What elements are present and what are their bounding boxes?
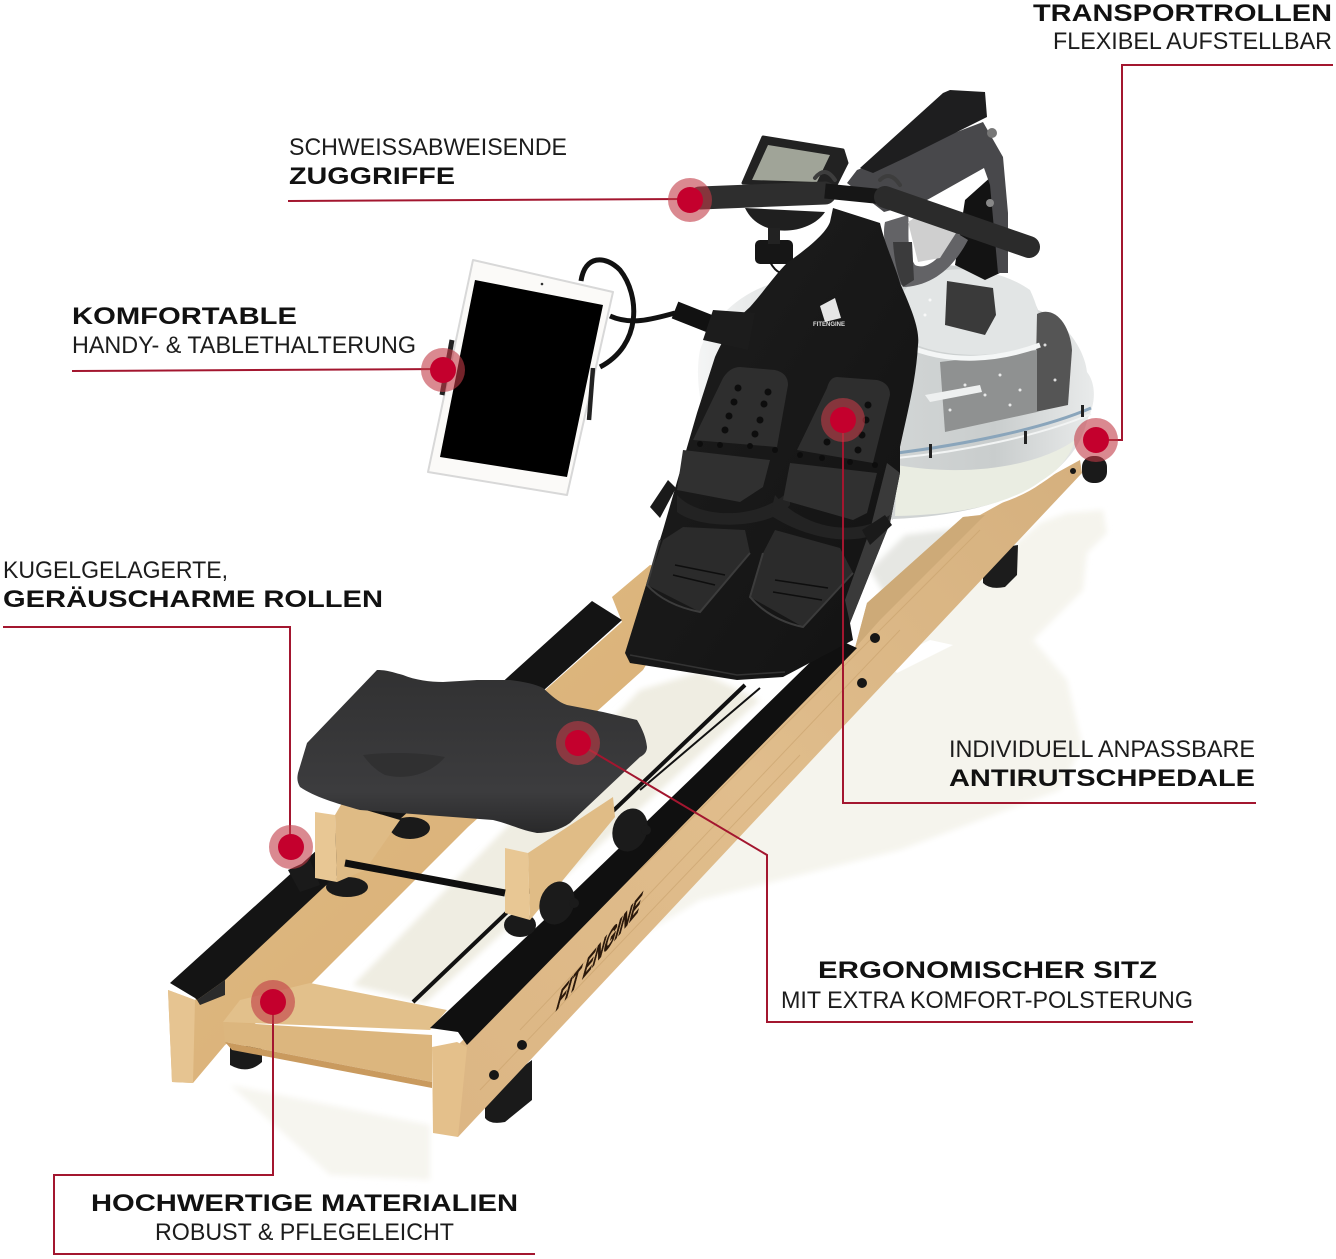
left pedal: [693, 367, 788, 453]
label: Sitz: [781, 957, 1193, 1014]
label: Materialien: HOCHWERTIGE MATERIALIEN: [91, 1190, 518, 1217]
hotspot markers: [251, 178, 1118, 1024]
tablet: [428, 260, 613, 495]
flywheel frame: [847, 90, 1008, 287]
label: Zuggriffe: ZUGGRIFFE: [289, 163, 455, 190]
right side guard: [845, 463, 900, 623]
label: Rollen: KUGELGELAGERTE,: [3, 557, 228, 584]
foot rests: [630, 527, 853, 675]
rollers: [534, 804, 653, 929]
label: Tablethalterung: HANDY- & TABLETHALTERUNG: [72, 332, 416, 359]
label: Transportrollen: [1033, 0, 1332, 55]
foot straps: [650, 450, 892, 545]
brand text on rail: FIT ENGINE: [553, 883, 646, 1019]
label: Sitz: MIT EXTRA KOMFORT-POLSTERUNG: [781, 987, 1193, 1014]
axle: [345, 863, 505, 893]
label: Sitz: ERGONOMISCHER SITZ: [818, 957, 1157, 984]
front cross bar: [223, 983, 447, 1088]
seat carriage: [288, 670, 653, 937]
left wooden rail: [168, 565, 700, 1083]
foot plate: [625, 208, 918, 680]
label: Zuggriffe: SCHWEISSABWEISENDE: [289, 134, 567, 161]
centre guide rail: [413, 685, 760, 1002]
seat cushion: [297, 670, 647, 833]
disc wheels: [288, 817, 536, 937]
monitor: [743, 137, 847, 187]
floor reflection: [230, 510, 1107, 1180]
logo: [813, 298, 845, 328]
tablet holder arm: [581, 260, 755, 367]
label: Zuggriffe: [289, 134, 567, 190]
right pedal: [797, 377, 890, 468]
label: Antirutschpedale: ANTIRUTSCHPEDALE: [949, 765, 1255, 792]
seat block left: [315, 803, 400, 882]
label: Tablethalterung: KOMFORTABLE: [72, 303, 297, 330]
handlebar: [700, 172, 1029, 247]
left black rail: [170, 601, 622, 1005]
label: Materialien: [91, 1190, 518, 1246]
label: Rollen: [3, 557, 383, 613]
back wooden rail: [458, 460, 1082, 1137]
label: Materialien: ROBUST & PFLEGELEICHT: [155, 1219, 454, 1246]
label: Antirutschpedale: INDIVIDUELL ANPASSBARE: [949, 736, 1255, 763]
monitor mount: [745, 208, 825, 273]
logo: FITENGINE: [813, 322, 845, 328]
seat block right: [505, 797, 615, 920]
back wheel: [1082, 456, 1107, 483]
right wooden post: [432, 1042, 467, 1137]
label: Transportrollen: TRANSPORTROLLEN: [1033, 0, 1332, 27]
feet: [230, 545, 1018, 1123]
label: Antirutschpedale: [949, 736, 1255, 792]
water tank: [698, 265, 1094, 520]
right black rail: [430, 638, 857, 1045]
rowing machine: [168, 90, 1107, 1137]
rail bolts: [489, 468, 1076, 1080]
label: Tablethalterung: [72, 303, 416, 359]
label: Transportrollen: FLEXIBEL AUFSTELLBAR: [1053, 28, 1332, 55]
label: Rollen: GERÄUSCHARME ROLLEN: [3, 586, 383, 613]
white floor patch: [885, 640, 953, 673]
